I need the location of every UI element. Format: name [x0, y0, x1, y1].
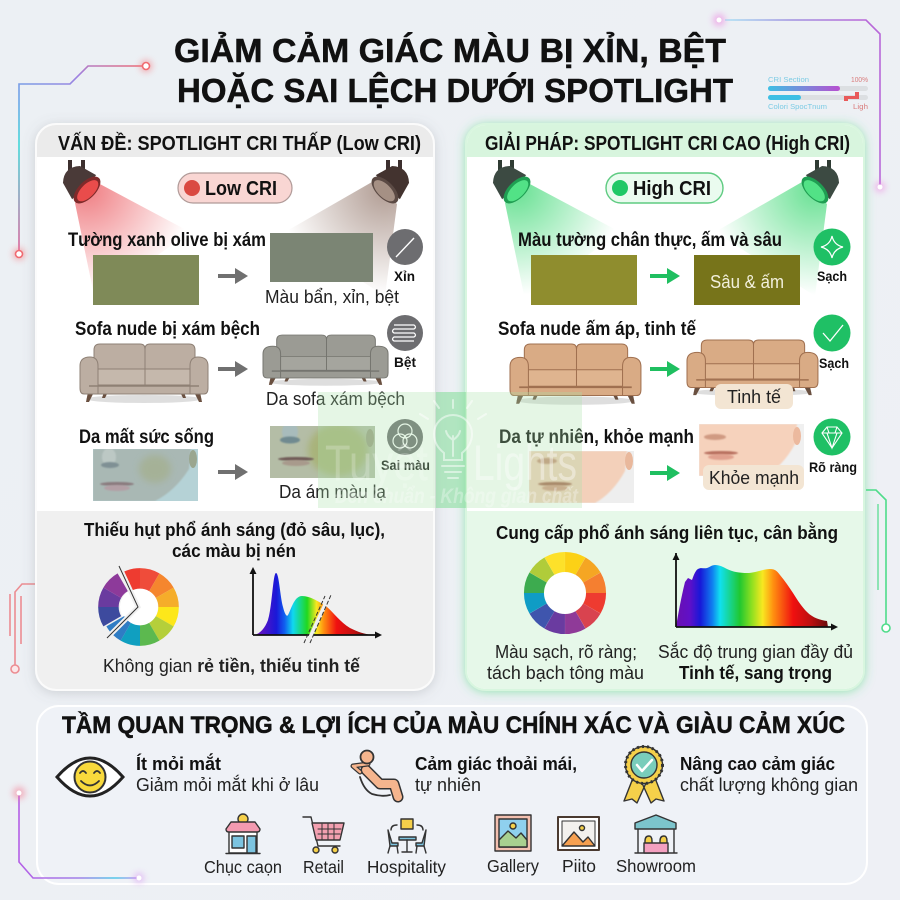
- colour wheel: full: [533, 561, 597, 625]
- photo: natural skin before: [529, 451, 634, 503]
- captions: high CRI: Sắc độ trung gian đầy đủ: [658, 641, 853, 662]
- row: true wall colour: Màu tường chân thực, ấm và sâu: [518, 230, 782, 251]
- label: showroom: Showroom: [616, 856, 696, 876]
- badge: High CRI: [606, 173, 723, 203]
- icon: hospitality: [388, 819, 426, 853]
- row: dull skin: Da mất sức sống: [79, 427, 214, 448]
- row: olive wall: [68, 229, 423, 307]
- icon: flat: Bệt: [394, 354, 416, 370]
- spotlight: red: [56, 159, 105, 208]
- icon: dull: Xỉn: [394, 268, 415, 284]
- circuit line: right green: [866, 490, 890, 632]
- row: olive wall: Màu bẩn, xỉn, bệt: [265, 287, 399, 307]
- icon: smiling eye: [57, 758, 123, 796]
- light beams: low CRI: [75, 182, 397, 300]
- benefits heading: TẦM QUAN TRỌNG & LỢI ÍCH CỦA MÀU CHÍNH XÁC VÀ GIÀU CẢM XÚC: [62, 710, 845, 739]
- row: dull skin: Da ám màu lạ: [279, 482, 387, 502]
- spotlight: brown: [367, 159, 416, 208]
- panel header: low CRI: [37, 125, 433, 157]
- label: gallery: Gallery: [487, 856, 539, 876]
- small CRI widget: [768, 75, 868, 111]
- row: true wall colour: [518, 228, 850, 305]
- small CRI widget: 100%: [851, 75, 868, 84]
- circuit line: left middle: [10, 584, 36, 673]
- row: true wall colour: Sâu & ấm: [710, 272, 784, 292]
- small CRI widget: CRI Section: [768, 75, 809, 84]
- benefit: comfort: Cảm giác thoải mái,: [415, 754, 577, 774]
- icon: shopping cart: [303, 817, 344, 853]
- title: GIẢM CẢM GIÁC MÀU BỊ XỈN, BỆT: [174, 32, 726, 69]
- captions: high CRI: tách bạch tông màu: [487, 663, 644, 683]
- spectrum chart: high CRI: [672, 553, 838, 630]
- benefit: comfort: tự nhiên: [415, 775, 481, 795]
- captions: high CRI: Tinh tế, sang trọng: [679, 663, 832, 683]
- benefit: comfort: [415, 754, 577, 795]
- row: warm sofa: [498, 314, 850, 409]
- tag: healthy: Khỏe mạnh: [709, 468, 799, 488]
- row: warm sofa: Sofa nude ấm áp, tinh tế: [498, 319, 696, 340]
- icon: gallery frame: [495, 815, 531, 851]
- section: low CRI spectrum: Thiếu hụt phổ ánh sáng (đỏ sâu, lục),: [84, 520, 385, 540]
- row: dull skin: [79, 419, 430, 502]
- title: [174, 32, 733, 109]
- spotlight: green left: [486, 159, 535, 208]
- icon: sparkle clean: [814, 228, 850, 284]
- small CRI widget: Colori SpocTnum: [768, 102, 827, 111]
- photo: natural skin after: [699, 424, 804, 476]
- circuit line: top right: [713, 14, 885, 192]
- icon: check clean: [814, 314, 850, 371]
- watermark bulb icon: [420, 400, 486, 478]
- label: photo: Piito: [562, 856, 596, 876]
- row: olive wall: Tường xanh olive bị xám: [68, 230, 266, 251]
- icon: flat: [387, 315, 423, 370]
- spotlight: green right: [797, 159, 846, 208]
- photo: dull skin after: [270, 422, 375, 478]
- section: low CRI spectrum: [37, 511, 433, 689]
- panel: low CRI problem: [36, 124, 434, 690]
- benefit: space quality: [680, 754, 858, 795]
- row: gray sofa: Sofa nude bị xám bệch: [75, 319, 260, 340]
- captions: high CRI: [487, 641, 853, 683]
- panel: high CRI solution: [466, 124, 864, 690]
- watermark: Đèn chuẩn - Không gian chất: [335, 485, 579, 508]
- icon: wrong colour: Sai màu: [381, 457, 430, 473]
- icon: sparkle clean: Sạch: [817, 268, 847, 284]
- badge: Low CRI: [178, 173, 292, 203]
- panel header: high CRI: GIẢI PHÁP: SPOTLIGHT CRI CAO (High CRI): [485, 132, 850, 155]
- wheel cut marker: [107, 566, 138, 638]
- icon: quality badge: [624, 746, 664, 803]
- icon: diamond clear: Rõ ràng: [809, 459, 857, 475]
- label: store: Chục caọn: [204, 857, 282, 877]
- colour wheel: compressed: [107, 577, 170, 637]
- badge: High CRI: High CRI: [633, 178, 711, 200]
- circuit line: top left: [13, 60, 152, 260]
- tag: refined: Tinh tế: [727, 387, 781, 407]
- small CRI widget: Ligh: [853, 102, 868, 111]
- panel header: high CRI: [467, 125, 863, 157]
- badge: Low CRI: Low CRI: [205, 178, 277, 200]
- benefit: space quality: chất lượng không gian: [680, 775, 858, 795]
- benefit: less eye strain: Ít mỏi mắt: [136, 753, 221, 774]
- row: healthy skin: [499, 418, 857, 503]
- icon: check clean: Sạch: [819, 355, 849, 371]
- benefit: less eye strain: Giảm mỏi mắt khi ở lâu: [136, 774, 319, 795]
- icon: photo frame: [558, 817, 599, 850]
- watermark: Lights: [473, 435, 577, 491]
- photo: dull skin before: [93, 448, 198, 501]
- row: healthy skin: Da tự nhiên, khỏe mạnh: [499, 427, 694, 448]
- title: HOẶC SAI LỆCH DƯỚI SPOTLIGHT: [177, 72, 733, 109]
- icon: store: [226, 814, 260, 854]
- section: high CRI spectrum: [467, 511, 863, 689]
- icon: dull: [387, 229, 423, 284]
- icon: relaxed person: [353, 750, 398, 797]
- icon: showroom: [635, 815, 677, 853]
- section: low CRI spectrum: Không gian rẻ tiền, thiếu tinh tế: [103, 656, 361, 676]
- captions: high CRI: Màu sạch, rõ ràng;: [495, 642, 637, 662]
- label: hospitality: Hospitality: [367, 857, 446, 877]
- icon: diamond clear: [809, 418, 857, 475]
- panel header: low CRI: VẤN ĐỀ: SPOTLIGHT CRI THẤP (Low CRI): [58, 132, 421, 155]
- spectrum chart: low CRI: [250, 567, 382, 643]
- section: high CRI spectrum: Cung cấp phổ ánh sáng liên tục, cân bằng: [496, 522, 838, 543]
- row: gray sofa: [75, 315, 423, 409]
- icon: wrong colour: [381, 419, 430, 473]
- tag: refined: [715, 384, 793, 409]
- benefit: less eye strain: [136, 753, 319, 795]
- benefit: space quality: Nâng cao cảm giác: [680, 754, 835, 774]
- light beams: high CRI: [505, 182, 827, 300]
- row: gray sofa: Da sofa xám bệch: [266, 389, 405, 409]
- circuit line: bottom left: [13, 787, 144, 883]
- watermark: [318, 392, 582, 508]
- section: low CRI spectrum: các màu bị nén: [172, 541, 296, 561]
- label: retail: Retail: [303, 857, 344, 877]
- panel: benefits: [37, 706, 867, 884]
- watermark: Tuyệt: [325, 435, 428, 491]
